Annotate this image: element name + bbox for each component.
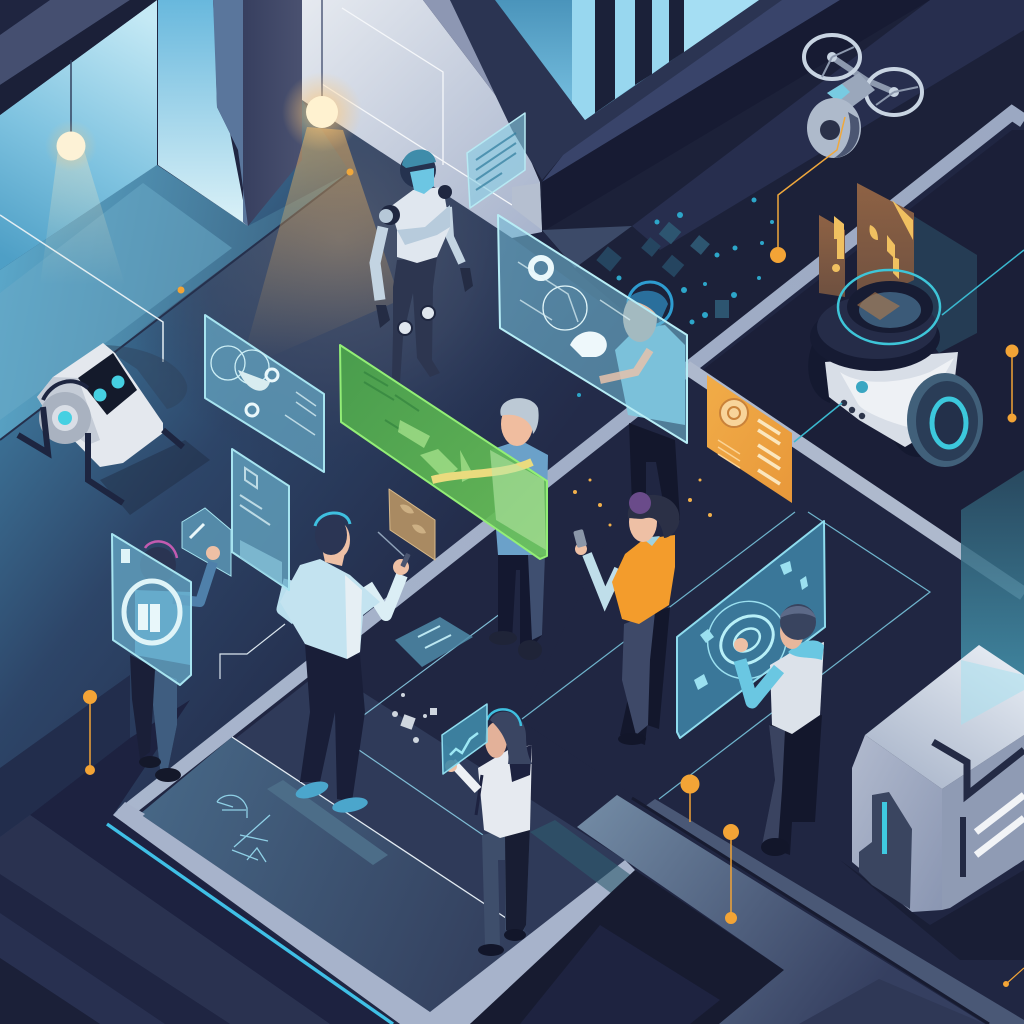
small tan panel [389,489,435,560]
round hologram panel [677,521,825,738]
humanoid robot [375,150,473,383]
upper hologram panel [498,215,687,443]
back wall [302,0,542,238]
top right structure [450,0,1024,367]
green hologram panel [340,345,547,559]
hanging lamp left [40,60,125,285]
orange node pins [84,287,1024,986]
data particles [577,198,774,397]
orange panel [707,375,792,503]
bottom dark steps and ramps [470,795,1024,1024]
wheeled robot right [794,250,1024,467]
small floating panel on floor [395,617,473,667]
floating squares [392,693,437,743]
left person hologram panel [112,534,191,685]
person with blue shirt behind upper panel [615,282,685,530]
long diagonal light bands [122,113,1024,815]
woman with tablet [442,704,532,956]
drone [770,35,922,263]
woman in orange shirt [573,492,679,745]
lower left floor platform [107,605,665,1024]
orange sparks [573,478,712,526]
tall panels left group [182,449,289,590]
pillar [158,0,302,226]
orange holographic towers [819,183,977,353]
wall hologram panel [467,113,525,208]
person behind left panel [130,541,220,782]
man with blue sleeves [734,604,824,856]
top left window and beams [0,0,163,362]
left hologram panel [205,315,324,472]
floor circuit lines [220,512,930,799]
cleaning robot left [18,343,210,515]
older man [489,398,548,660]
hanging lamp centre [240,0,400,370]
storage machine [840,470,1024,960]
man in white shirt [280,513,411,815]
